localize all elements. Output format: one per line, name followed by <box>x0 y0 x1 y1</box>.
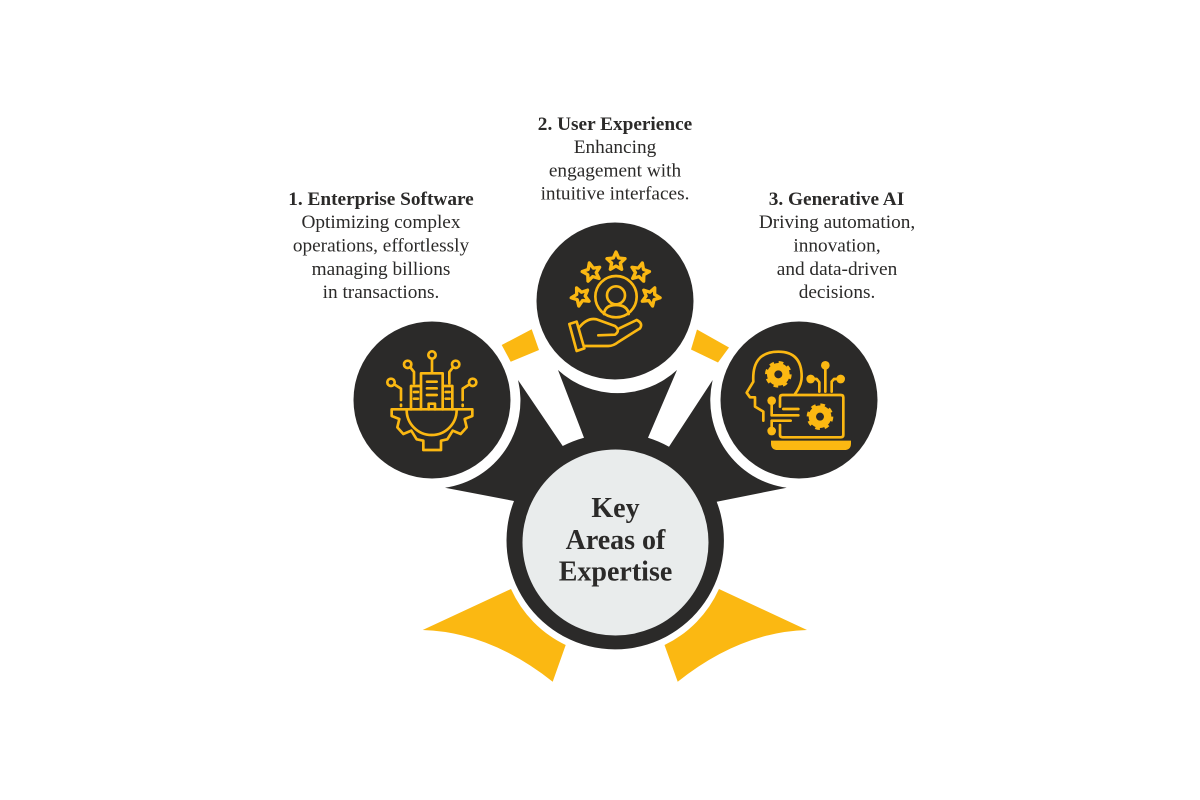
text block: enterprise software <box>288 189 474 303</box>
yellow accent: upper left <box>502 329 539 362</box>
text block: enterprise software: 1. Enterprise Software <box>288 189 474 210</box>
central connector shape <box>445 370 787 649</box>
text block: user experience: engagement with <box>549 160 681 182</box>
text block: generative AI: 3. Generative AI <box>769 189 904 210</box>
panel: enterprise software circle <box>354 322 510 478</box>
icon: enterprise building on gear <box>387 351 476 450</box>
text block: enterprise software: in transactions. <box>323 282 439 303</box>
text block: user experience: Enhancing <box>574 137 657 158</box>
text block: generative AI: decisions. <box>799 282 875 303</box>
icon: AI head and laptop <box>747 352 851 450</box>
central circle <box>522 450 708 636</box>
text block: user experience <box>538 114 693 204</box>
icon: hand holding user with stars <box>568 252 663 351</box>
central title: Areas of <box>566 525 666 556</box>
text block: enterprise software: managing billions <box>312 259 450 280</box>
panel: user experience circle <box>536 222 694 380</box>
panel: generative AI circle <box>720 322 878 478</box>
text block: user experience: intuitive interfaces. <box>541 184 689 204</box>
central title <box>559 493 672 588</box>
text block: user experience: 2. User Experience <box>538 114 693 135</box>
yellow accent: upper right <box>691 330 729 362</box>
text block: generative AI <box>759 189 915 303</box>
central title: Expertise <box>559 556 672 588</box>
text block: generative AI: innovation, <box>793 236 881 256</box>
yellow accent: bottom right <box>664 589 807 682</box>
yellow accent: bottom left <box>423 589 566 682</box>
text block: enterprise software: operations, effortlessly <box>293 236 470 256</box>
text block: generative AI: and data-driven <box>777 259 898 280</box>
central title: Key <box>591 493 640 524</box>
text block: generative AI: Driving automation, <box>759 212 915 233</box>
text block: enterprise software: Optimizing complex <box>301 212 461 233</box>
